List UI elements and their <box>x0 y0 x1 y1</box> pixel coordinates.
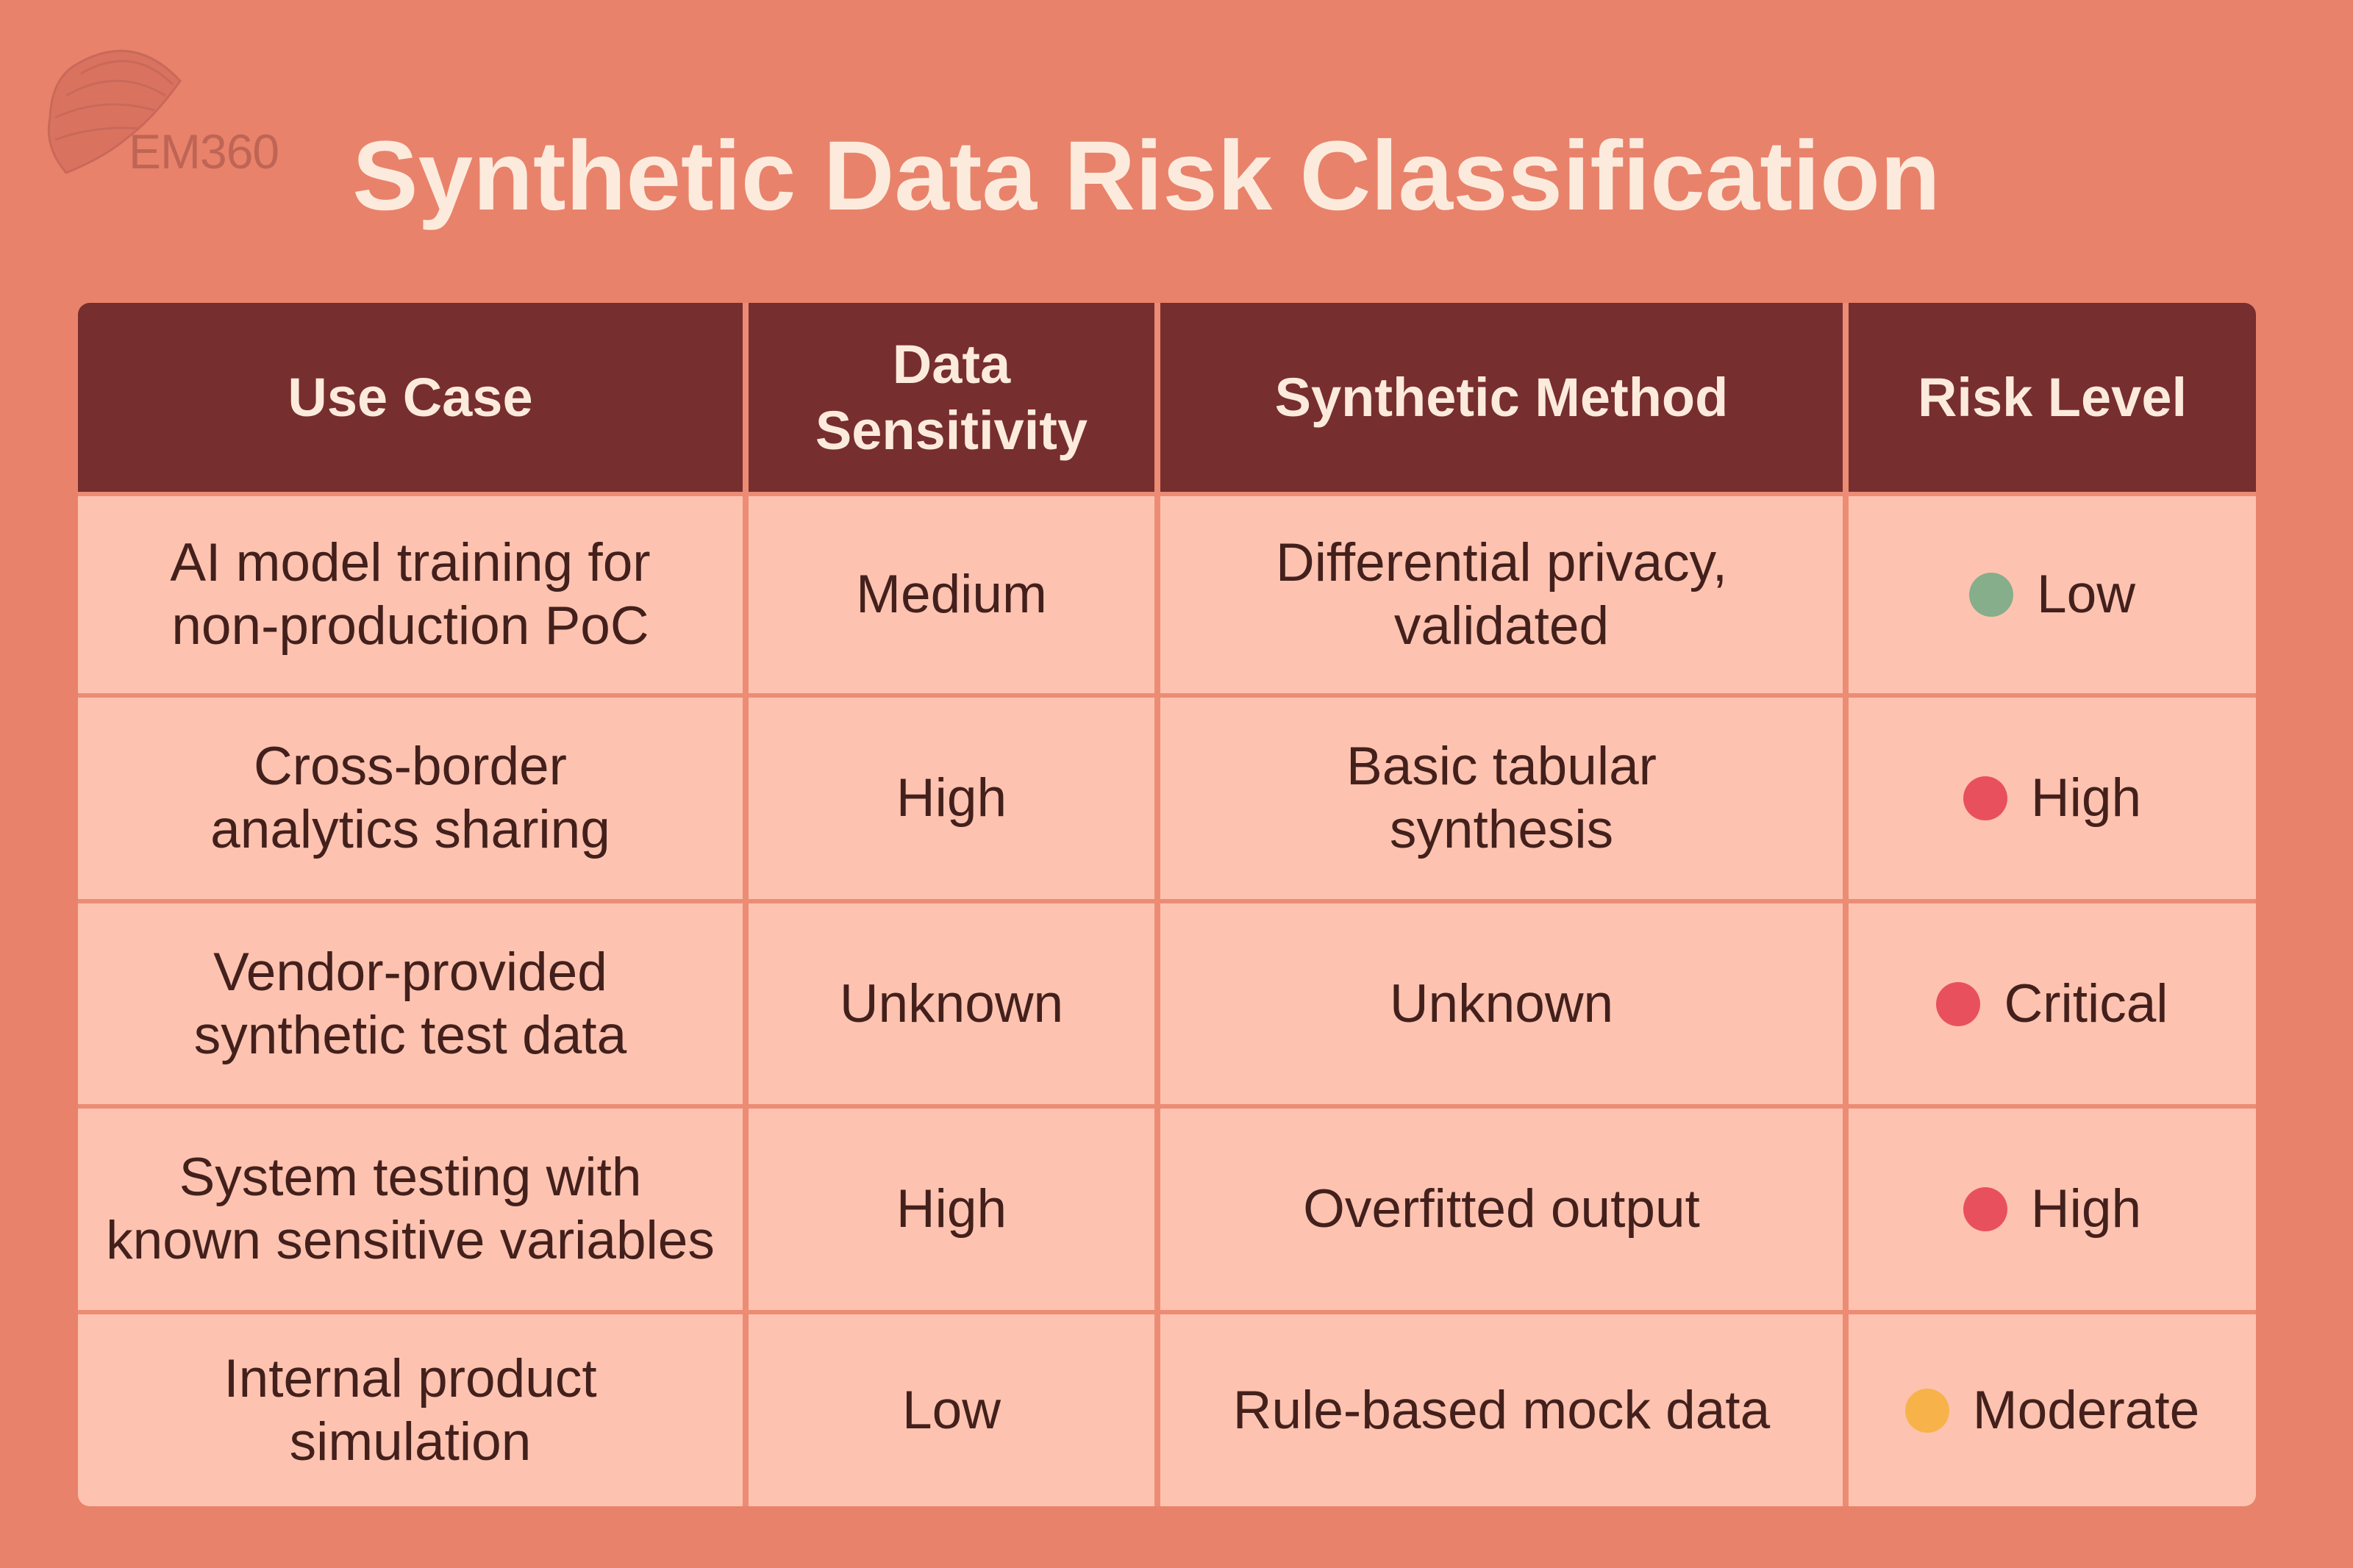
row 1: non-production PoC <box>171 596 649 656</box>
row 1 <box>78 496 743 693</box>
table: Medium <box>856 565 1047 624</box>
table: Differential privacy, <box>1276 533 1727 593</box>
row 4 <box>78 1109 743 1310</box>
row 4: known sensitive variables <box>106 1211 715 1270</box>
table: Rule-based mock data <box>1233 1381 1770 1439</box>
table: Basic tabular <box>1346 737 1657 796</box>
logo <box>47 50 279 179</box>
table: High <box>2031 768 2141 828</box>
header row <box>78 303 743 492</box>
table: High <box>2031 1179 2141 1239</box>
row 4: System testing with <box>179 1148 641 1207</box>
header row: Use Case <box>288 366 533 428</box>
table: Overfitted output <box>1303 1179 1700 1239</box>
table: validated <box>1394 596 1609 656</box>
table: synthesis <box>1390 800 1613 859</box>
title: Synthetic Data Risk Classification <box>352 121 1940 231</box>
table: Critical <box>2004 973 2168 1034</box>
row 1: AI model training for <box>170 533 651 593</box>
table: Moderate <box>1973 1381 2199 1439</box>
table: Synthetic Method <box>1275 366 1728 428</box>
row 5 <box>78 1314 743 1506</box>
row 3: synthetic test data <box>194 1006 626 1064</box>
table: Unknown <box>840 973 1063 1034</box>
table: Unknown <box>1390 973 1613 1034</box>
table: High <box>896 768 1007 828</box>
row 3 <box>78 903 743 1104</box>
table: Low <box>902 1381 1001 1439</box>
table: Data <box>893 334 1010 394</box>
row 2: analytics sharing <box>210 800 610 859</box>
table <box>78 303 2256 1506</box>
table: Low <box>2037 565 2135 624</box>
row 2: Cross-border <box>254 737 567 796</box>
row 5: Internal product <box>224 1348 597 1408</box>
table: High <box>896 1179 1007 1239</box>
table: Risk Level <box>1918 366 2187 428</box>
table: Sensitivity <box>815 400 1088 460</box>
row 3: Vendor-provided <box>213 942 607 1001</box>
row 2 <box>78 698 743 899</box>
logo: EM360 <box>129 124 279 179</box>
row 5: simulation <box>290 1411 531 1472</box>
